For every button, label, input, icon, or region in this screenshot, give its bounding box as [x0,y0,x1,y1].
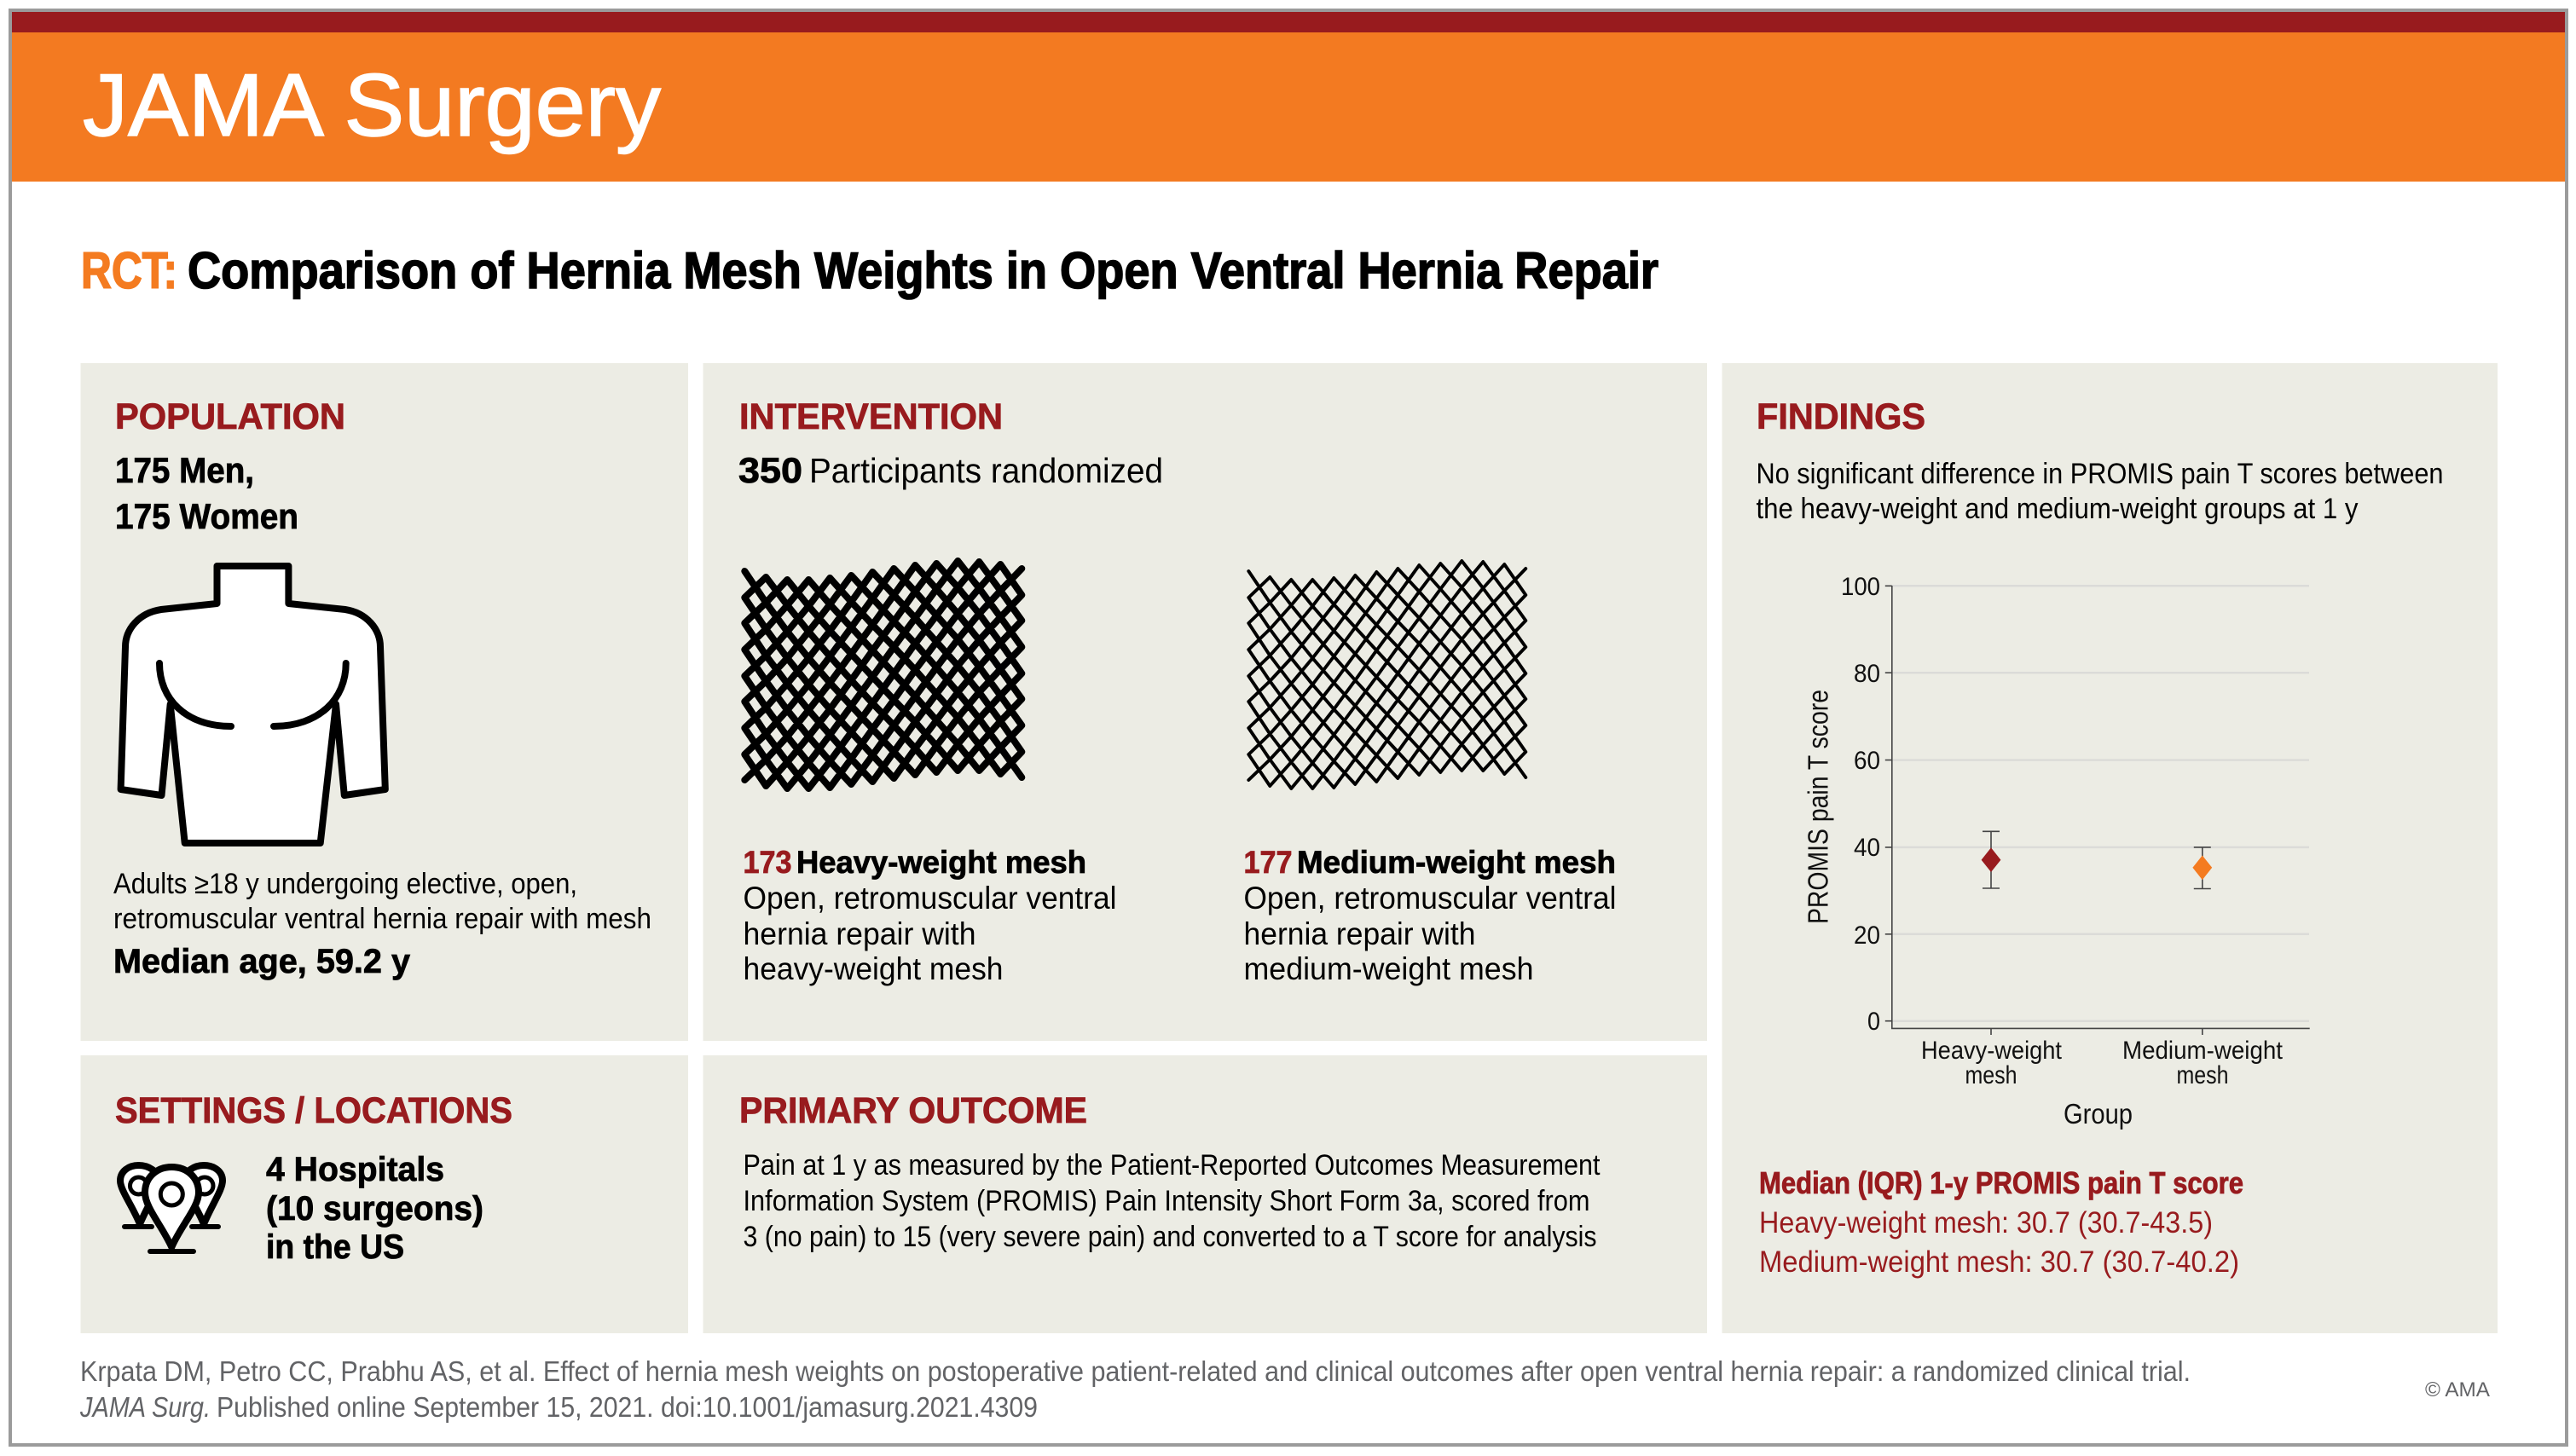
panel: population [80,363,688,1041]
heading: settings: SETTINGS / LOCATIONS [115,1090,512,1131]
y-axis tick labels [1841,573,1880,1036]
median age: Median age, 59.2 y [113,943,411,980]
settings text: (10 surgeons) [266,1190,483,1228]
heading: primary outcome: PRIMARY OUTCOME [739,1090,1087,1131]
grid lines [1892,586,2309,1021]
icon: torso [121,566,385,843]
data point: heavy-weight mesh [1982,831,2000,888]
participants randomized: Participants randomized [809,451,1163,490]
data point: medium-weight mesh [2192,847,2212,888]
settings text: 4 Hospitals [266,1151,444,1188]
median IQR results: Heavy-weight mesh: 30.7 (30.7-43.5) [1759,1206,2213,1239]
x-axis category labels: Medium-weight [2122,1037,2284,1065]
panel: intervention [703,363,1707,1041]
y-axis title: PROMIS pain T score [1803,690,1833,924]
participants randomized: 350 [738,450,802,490]
chart: PROMIS pain T score by group [1803,573,2310,1130]
panel: primary outcome [703,1055,1707,1333]
x-axis category labels: Heavy-weight [1921,1037,2063,1065]
y-axis tick labels: 20 [1854,922,1880,950]
x-axis category labels [1921,1037,2284,1089]
outcome description: Information System (PROMIS) Pain Intensity Short Form 3a, scored from [744,1185,1589,1217]
y-axis tick labels: 40 [1854,834,1880,862]
heavy-weight mesh arm: Heavy-weight mesh [796,845,1086,880]
citation: Krpata DM, Petro CC, Prabhu AS, et al. Effect of hernia mesh weights on postoperative patient-related and clinical outcomes after open ventral hernia repair: a randomized clinical trial. [80,1355,2191,1387]
medium-weight mesh arm [1243,845,1617,986]
participants by sex [115,450,298,536]
citation [79,1355,2191,1423]
medium-weight mesh arm: medium-weight mesh [1243,951,1533,986]
icon: medium-weight mesh [1248,561,1525,789]
heading: population: POPULATION [115,396,345,437]
participants by sex: 175 Men, [115,450,254,490]
copyright: © AMA [2425,1378,2490,1401]
y-axis tick labels: 60 [1854,747,1880,775]
eligibility text: Adults ≥18 y undergoing elective, open, [113,868,577,900]
icon: heavy-weight mesh [744,561,1022,789]
heavy-weight mesh arm: hernia repair with [744,916,975,951]
medium-weight mesh arm: Medium-weight mesh [1297,845,1616,880]
median IQR results: Median (IQR) 1-y PROMIS pain T score [1759,1165,2243,1200]
panel: findings [1722,363,2498,1333]
title: Comparison of Hernia Mesh Weights in Open Ventral Hernia Repair [188,242,1658,299]
y-axis tick labels: 100 [1841,573,1880,601]
y-axis tick labels: 0 [1867,1008,1880,1036]
journal name: JAMA Surgery [83,56,661,155]
outcome description: 3 (no pain) to 15 (very severe pain) and converted to a T score for analysis [744,1221,1596,1253]
medium-weight mesh arm: Open, retromuscular ventral [1243,881,1617,916]
participants by sex: 175 Women [115,496,298,536]
heavy-weight mesh arm: heavy-weight mesh [744,951,1003,986]
median IQR results [1759,1165,2243,1279]
y-axis tick labels: 80 [1854,660,1880,688]
icon: map pins [120,1165,223,1251]
x-axis title: Group [2064,1098,2133,1130]
settings text [266,1151,483,1266]
findings summary [1757,458,2444,525]
medium-weight mesh arm: 177 [1243,845,1293,880]
findings summary: the heavy-weight and medium-weight groups at 1 y [1757,493,2359,525]
eligibility text [113,868,651,935]
settings text: in the US [266,1228,404,1266]
outcome description [744,1149,1601,1253]
outcome description: Pain at 1 y as measured by the Patient-Reported Outcomes Measurement [744,1149,1601,1182]
axes [1885,586,2310,1035]
x-axis category labels: mesh [2176,1061,2229,1089]
eligibility text: retromuscular ventral hernia repair with mesh [113,903,651,935]
heading: findings: FINDINGS [1757,396,1925,437]
heavy-weight mesh arm: Open, retromuscular ventral [744,881,1117,916]
panel: settings and locations [80,1055,688,1333]
findings summary: No significant difference in PROMIS pain T scores between [1757,458,2444,490]
journal header band [12,12,2565,182]
x-axis category labels: mesh [1965,1061,2017,1089]
citation: JAMA Surg. [79,1391,211,1423]
medium-weight mesh arm: hernia repair with [1243,916,1475,951]
citation: Published online September 15, 2021. doi:10.1001/jamasurg.2021.4309 [217,1391,1038,1423]
heading: intervention: INTERVENTION [739,396,1003,437]
median IQR results: Medium-weight mesh: 30.7 (30.7-40.2) [1759,1245,2239,1279]
title: RCT: [81,242,177,299]
heavy-weight mesh arm: 173 [744,845,791,880]
heavy-weight mesh arm [744,845,1117,986]
